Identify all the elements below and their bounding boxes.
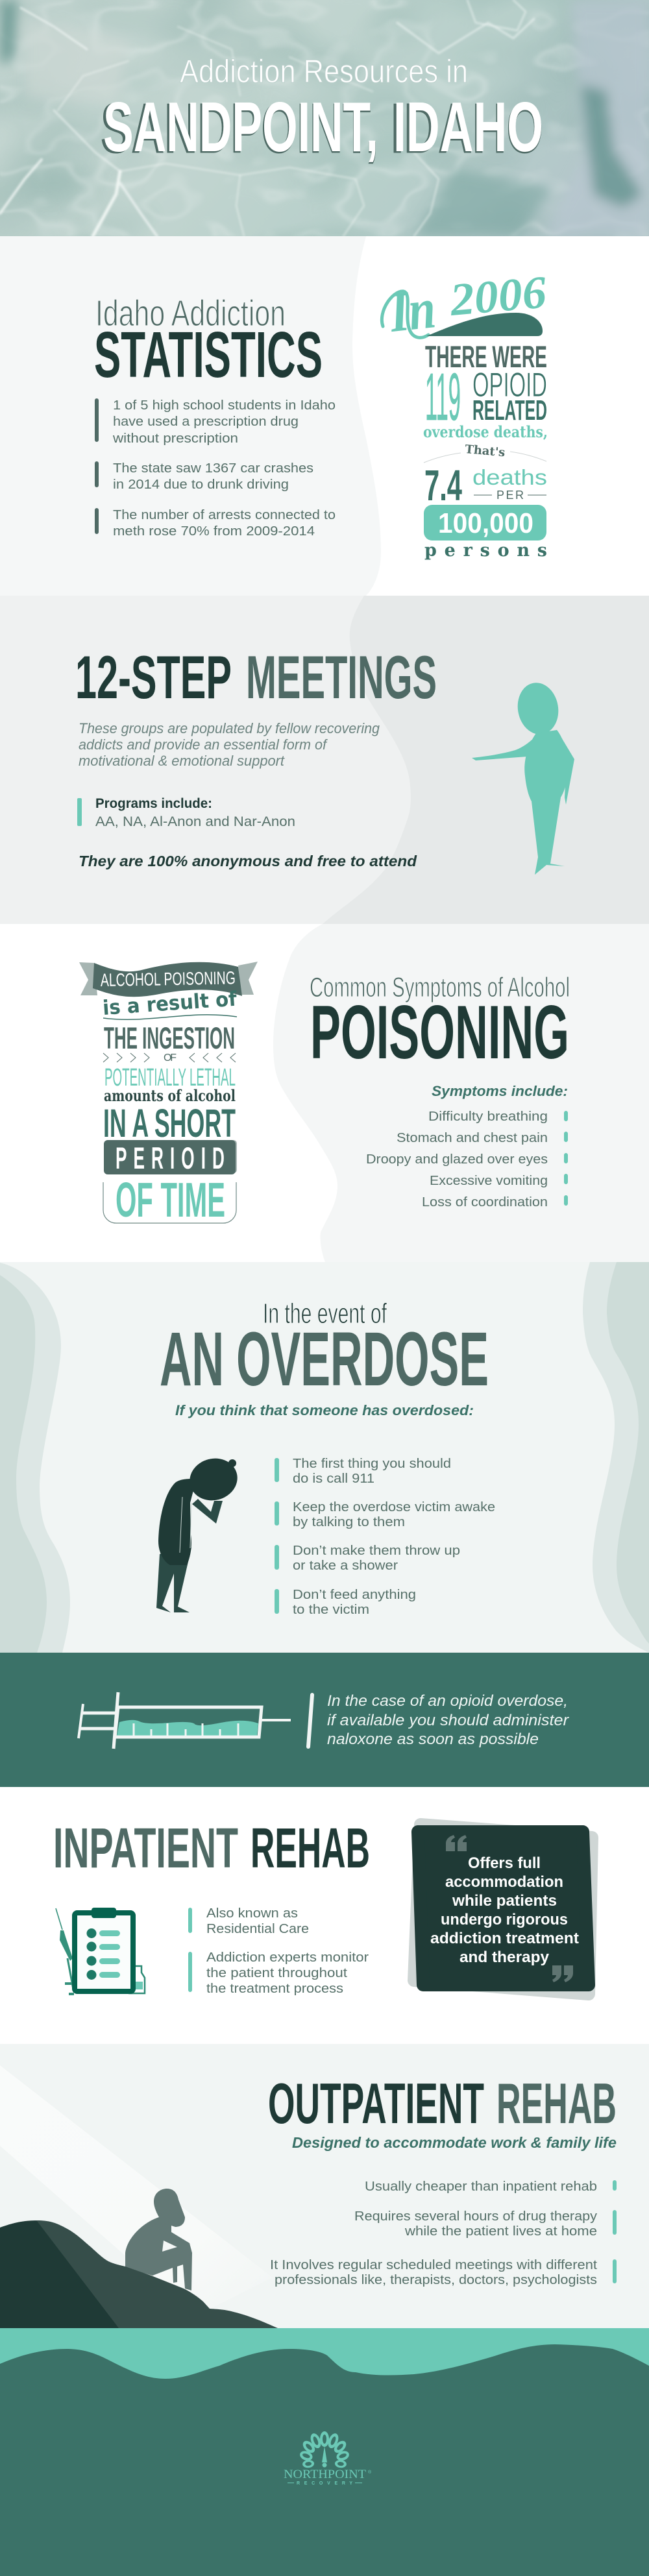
programs callout: Programs include: — [95, 796, 212, 811]
naloxone note: if available you should administer — [327, 1712, 569, 1729]
typographic stat: 119 opioid deaths in 2006: deaths — [472, 465, 547, 489]
stat bullet 2: The state saw 1367 car crashes — [113, 461, 313, 476]
quote card — [414, 1825, 592, 1994]
stat bullet 1: 1 of 5 high school students in Idaho — [113, 398, 336, 413]
inpatient bullets — [188, 1906, 369, 1996]
programs callout — [77, 796, 295, 829]
inpatient bullets: Residential Care — [206, 1922, 309, 1936]
typographic poster: alcohol poisoning definition: ALCOHOL POISONING — [101, 967, 236, 990]
stat bullet 3 — [95, 508, 336, 539]
symptom list: Stomach and chest pain — [397, 1131, 548, 1145]
typographic stat: 119 opioid deaths in 2006: 100,000 — [438, 507, 533, 539]
quote text: addiction treatment — [430, 1930, 579, 1947]
typographic stat: 119 opioid deaths in 2006: 119 — [425, 359, 461, 434]
icon: closing quote — [552, 1965, 573, 1982]
panel: 12-step meetings — [0, 596, 649, 924]
inpatient bullets: Also known as — [206, 1906, 298, 1921]
outpatient list: It Involves regular scheduled meetings with different — [270, 2258, 597, 2272]
typographic stat: 119 opioid deaths in 2006: PER — [496, 489, 524, 502]
symptom list — [366, 1110, 568, 1209]
stat bullet 2: in 2014 due to drunk driving — [113, 478, 289, 492]
subheading: if you think: If you think that someone has overdosed: — [175, 1402, 474, 1418]
outpatient list — [270, 2180, 617, 2287]
stat bullet 1: without prescription — [112, 431, 238, 446]
title: sandpoint idaho: SANDPOINT, — [101, 89, 378, 168]
overdose action list — [275, 1457, 495, 1617]
heading: statistics: STATISTICS — [94, 319, 323, 391]
heading: 12-step meetings: 12-STEP — [75, 643, 232, 711]
subheading: designed to accommodate: Designed to accommodate work & family life — [292, 2134, 617, 2151]
symptom list: Difficulty breathing — [428, 1110, 548, 1124]
title: sandpoint idaho: IDAHO — [393, 88, 543, 167]
stat bullet 1: have used a prescription drug — [113, 415, 299, 429]
typographic poster: alcohol poisoning definition: OF — [164, 1052, 177, 1063]
inpatient bullets: Addiction experts monitor — [206, 1950, 369, 1965]
typographic poster: alcohol poisoning definition: POTENTIALLY LETHAL — [104, 1064, 236, 1091]
overdose action list: Don’t make them throw up — [293, 1544, 460, 1558]
overdose action list: Don’t feed anything — [293, 1588, 416, 1602]
icon: opening quote — [446, 1835, 467, 1851]
panel: footer — [0, 2328, 649, 2576]
heading: outpatient rehab: OUTPATIENT — [268, 2071, 484, 2135]
typographic poster: alcohol poisoning definition: OF TIME — [116, 1173, 225, 1227]
overdose action list: to the victim — [293, 1603, 369, 1617]
inpatient bullets: the patient throughout — [206, 1966, 347, 1980]
panel: outpatient rehab — [0, 2044, 649, 2328]
stat bullet 1 — [95, 398, 336, 446]
heading: in the event of: In the event of — [263, 1298, 387, 1330]
panel: naloxone band — [0, 1653, 649, 1787]
logo: northpoint recovery — [284, 2431, 372, 2486]
typographic stat: 119 opioid deaths in 2006: RELATED — [472, 395, 547, 426]
typographic stat: 119 opioid deaths in 2006: 7.4 — [424, 461, 462, 510]
typographic stat: 119 opioid deaths in 2006: persons — [424, 541, 547, 561]
typographic poster: alcohol poisoning definition: PERIOID — [116, 1141, 231, 1175]
naloxone note: naloxone as soon as possible — [327, 1731, 539, 1748]
quote text: while patients — [452, 1892, 557, 1910]
logo: northpoint recovery: NORTHPOINT — [284, 2468, 366, 2481]
description paragraph: motivational & emotional support — [79, 753, 285, 769]
typographic poster: alcohol poisoning definition: is a result of — [102, 988, 238, 1020]
typographic stat: 119 opioid deaths in 2006: THERE WERE — [425, 339, 547, 374]
typographic poster: alcohol poisoning definition — [79, 962, 258, 1227]
overdose action list: or take a shower — [293, 1559, 398, 1573]
typographic stat: 119 opioid deaths in 2006: 2006 — [448, 267, 548, 326]
naloxone note — [327, 1692, 569, 1748]
stat bullet 3: meth rose 70% from 2009-2014 — [113, 524, 315, 539]
subheading: symptoms include: Symptoms include: — [432, 1083, 568, 1099]
divider: naloxone — [308, 1695, 312, 1747]
overdose action list: Keep the overdose victim awake — [293, 1500, 495, 1514]
title: sandpoint idaho: SANDPOINT, — [103, 88, 378, 167]
typographic stat: 119 opioid deaths in 2006: OPIOID — [472, 366, 547, 404]
panel: overdose — [0, 1262, 649, 1653]
panel: alcohol poisoning — [0, 924, 649, 1262]
description paragraph: addicts and provide an essential form of — [79, 736, 328, 753]
heading: 12-step meetings: MEETINGS — [246, 643, 437, 711]
naloxone note: In the case of an opioid overdose, — [327, 1692, 568, 1710]
panel: inpatient rehab — [0, 1787, 649, 2044]
typographic poster: alcohol poisoning definition: amounts of alcohol — [104, 1086, 236, 1105]
icon: seated figure on hill — [0, 2189, 278, 2328]
heading: 12-step meetings — [75, 643, 437, 711]
icon: clipboard with syringe and bottle — [56, 1908, 145, 1994]
typographic poster: alcohol poisoning definition: THE INGESTION — [104, 1021, 235, 1055]
quote text: undergo rigorous — [441, 1911, 568, 1928]
icon: syringe — [79, 1692, 291, 1749]
symptom list: Excessive vomiting — [430, 1174, 548, 1188]
logo: northpoint recovery: RECOVERY — [297, 2481, 352, 2486]
icon: hunched figure — [156, 1453, 242, 1612]
panel: statistics — [0, 236, 649, 596]
quote text: and therapy — [459, 1949, 550, 1966]
typographic stat: 119 opioid deaths in 2006: In — [386, 277, 439, 345]
description paragraph — [79, 720, 380, 769]
programs callout: AA, NA, Al-Anon and Nar-Anon — [95, 814, 295, 829]
icon: teal figure pointing — [472, 679, 574, 875]
overdose action list: do is call 911 — [293, 1472, 374, 1486]
typographic stat: 119 opioid deaths in 2006 — [382, 267, 548, 561]
overdose action list: The first thing you should — [293, 1457, 451, 1471]
outpatient list: professionals like, therapists, doctors, psychologists — [275, 2273, 597, 2287]
symptom list: Loss of coordination — [422, 1195, 548, 1209]
outpatient list: Requires several hours of drug therapy — [354, 2209, 597, 2224]
logo: northpoint recovery: ® — [368, 2470, 372, 2475]
overdose action list: by talking to them — [293, 1515, 405, 1529]
symptom list: Droopy and glazed over eyes — [366, 1152, 548, 1167]
description paragraph: These groups are populated by fellow recovering — [79, 720, 380, 736]
title: sandpoint idaho: IDAHO — [391, 89, 543, 168]
quote text: Offers full — [468, 1854, 541, 1872]
heading: inpatient rehab: INPATIENT — [53, 1817, 238, 1880]
typographic stat: 119 opioid deaths in 2006: That's — [465, 443, 506, 459]
stat bullet 3: The number of arrests connected to — [113, 508, 336, 522]
outpatient list: while the patient lives at home — [404, 2224, 597, 2239]
quote text: accommodation — [445, 1873, 563, 1891]
title: addiction resources in: Addiction Resources in — [180, 53, 468, 90]
heading: inpatient rehab: REHAB — [251, 1817, 370, 1880]
heading: idaho addiction: Idaho Addiction — [95, 293, 286, 334]
stat bullet 2 — [95, 461, 313, 492]
panel: hero — [0, 0, 649, 236]
outpatient list: Usually cheaper than inpatient rehab — [365, 2180, 597, 2194]
typographic stat: 119 opioid deaths in 2006: overdose deaths, — [423, 422, 548, 441]
anonymous statement: They are 100% anonymous and free to attend — [79, 853, 417, 869]
quote text — [430, 1854, 579, 1966]
inpatient bullets: the treatment process — [206, 1982, 343, 1996]
typographic poster: alcohol poisoning definition: IN A SHORT — [103, 1101, 236, 1145]
